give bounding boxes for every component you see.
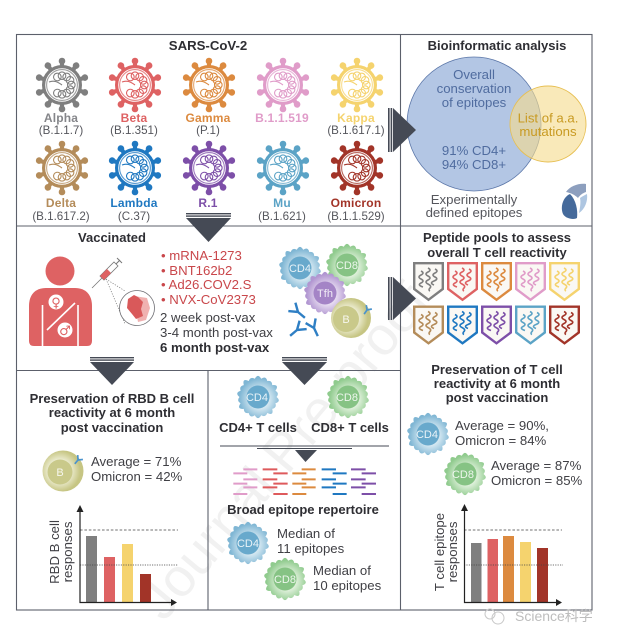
icon: antibodies bbox=[287, 303, 323, 340]
label: CD4+ T cells: CD4+ T cells bbox=[219, 420, 297, 435]
icon: spike protein in magnified circle bbox=[106, 279, 154, 326]
heading: preservation of T cell reactivity: post vaccination bbox=[446, 390, 548, 405]
list: time points: 3-4 month post-vax bbox=[160, 325, 273, 340]
bar chart: T cell epitope responses: responses bbox=[445, 521, 460, 582]
bar chart: RBD B cell responses bbox=[47, 505, 178, 606]
cell: B with stats: Average = 71% bbox=[91, 454, 182, 469]
heading: preservation of RBD B cell reactivity: reactivity at 6 month bbox=[49, 405, 175, 420]
cell: CD8 median: 10 epitopes bbox=[313, 578, 382, 593]
variant: Delta: Delta bbox=[46, 196, 76, 210]
variant: Alpha: (B.1.1.7) bbox=[39, 124, 83, 137]
list: vaccines: • Ad26.COV2.S bbox=[161, 277, 252, 292]
variant: R.1: R.1 bbox=[198, 196, 218, 210]
panel: SARS-CoV-2 variants bbox=[32, 38, 385, 223]
arrow: variants to bioinformatic analysis bbox=[388, 108, 416, 152]
variant: Delta: (B.1.617.2) bbox=[32, 210, 90, 223]
heading: preservation of T cell reactivity: reactivity at 6 month bbox=[434, 376, 560, 391]
variant: Delta bbox=[32, 141, 90, 223]
list: time points: 6 month post-vax bbox=[160, 340, 270, 355]
variant: Alpha bbox=[35, 58, 89, 137]
cell: CD4 median: 11 epitopes bbox=[277, 541, 345, 556]
variant: Lambda: Lambda bbox=[110, 196, 158, 210]
variant: B.1.1.519: B.1.1.519 bbox=[255, 111, 309, 125]
epitope fragments bbox=[233, 469, 376, 494]
venn diagram: List of a.a. bbox=[518, 110, 578, 126]
heading: preservation of T cell reactivity: Preservation of T cell bbox=[431, 362, 563, 377]
variant: Lambda bbox=[108, 141, 162, 223]
cell: CD4 median: Median of bbox=[277, 526, 335, 541]
panel: bioinformatic analysis bbox=[407, 38, 587, 220]
venn diagram: mutations bbox=[519, 124, 577, 139]
cell: CD4: CD4 bbox=[289, 263, 311, 275]
caption: experimentally defined epitopes: defined epitopes bbox=[426, 205, 523, 220]
bar chart: T cell epitope responses: T cell epitope bbox=[432, 513, 447, 591]
variant: Mu: Mu bbox=[273, 196, 291, 210]
watermark: Science科学: Science科学 bbox=[515, 608, 593, 624]
heading line two: overall T cell reactivity bbox=[427, 245, 568, 260]
heading: Bioinformatic analysis: Bioinformatic analysis bbox=[428, 38, 566, 53]
caption: experimentally defined epitopes: Experimentally bbox=[431, 192, 518, 207]
variant: Omicron bbox=[327, 141, 385, 223]
variant: Alpha: Alpha bbox=[44, 111, 78, 125]
variant: Mu bbox=[256, 141, 310, 223]
list: time points bbox=[160, 310, 273, 355]
list: vaccines: • mRNA-1273 bbox=[161, 248, 242, 263]
cell: CD8 with stats: Average = 87% bbox=[491, 458, 582, 473]
list: vaccines: • BNT162b2 bbox=[161, 263, 232, 278]
panel: B cell preservation bbox=[30, 391, 194, 606]
variant: Lambda: (C.37) bbox=[118, 210, 150, 223]
venn diagram: of epitopes bbox=[442, 95, 507, 110]
venn diagram: Overall bbox=[453, 67, 495, 82]
list: vaccines bbox=[161, 248, 256, 307]
variant: Gamma: (P.1) bbox=[196, 124, 220, 137]
cell: CD4: CD4 bbox=[246, 392, 268, 404]
variant: Kappa: Kappa bbox=[337, 111, 375, 125]
variant: Beta: (B.1.351) bbox=[110, 124, 158, 137]
cell: B with stats: Omicron = 42% bbox=[91, 469, 183, 484]
venn diagram: 91% CD4+ bbox=[442, 143, 506, 158]
panel: T cell epitope repertoire bbox=[219, 376, 389, 600]
icon: immune cells bbox=[279, 244, 372, 340]
arrow: variants to vaccinated bbox=[186, 213, 231, 242]
cell: B with stats: B bbox=[56, 467, 64, 479]
arrow: vaccinated to T cell panel bbox=[282, 357, 327, 385]
variant: Gamma: Gamma bbox=[185, 111, 231, 125]
icon: person with sex symbols: ♀ bbox=[51, 296, 61, 311]
cell: Tfh: Tfh bbox=[317, 288, 333, 300]
cell: B with stats bbox=[42, 450, 183, 492]
list: time points: 2 week post-vax bbox=[160, 310, 256, 325]
watermark: Journal Pre-proof: Journal Pre-proof bbox=[127, 272, 442, 631]
cell: CD8 with stats: Omicron = 85% bbox=[491, 473, 583, 488]
bar chart: T cell epitope responses bbox=[432, 504, 563, 606]
heading: Vaccinated: Vaccinated bbox=[78, 230, 146, 245]
bar chart: RBD B cell responses: responses bbox=[60, 521, 75, 582]
cell: CD4 with stats: CD4 bbox=[416, 429, 438, 441]
icon: syringe bbox=[92, 258, 122, 288]
variant: Mu: (B.1.621) bbox=[258, 210, 306, 223]
panel: T cell preservation bbox=[407, 362, 583, 606]
variant: Beta bbox=[108, 58, 162, 137]
icon: journal logo bbox=[562, 184, 587, 219]
variant: Omicron: (B.1.1.529) bbox=[327, 210, 385, 223]
variant: B.1.1.519 bbox=[255, 58, 310, 125]
list: vaccines: • NVX-CoV2373 bbox=[161, 292, 256, 307]
variant: Beta: Beta bbox=[121, 111, 148, 125]
cell: B: B bbox=[342, 314, 350, 326]
cell: CD4 bbox=[237, 376, 279, 418]
venn diagram: 94% CD8+ bbox=[442, 157, 506, 172]
variant: Gamma bbox=[182, 58, 236, 137]
bar chart: RBD B cell responses: RBD B cell bbox=[47, 520, 62, 584]
arrow: vaccinated to peptide pools bbox=[388, 277, 416, 320]
arrow: vaccinated to B cell panel bbox=[90, 357, 134, 385]
cell: CD4 median bbox=[227, 522, 345, 564]
cell: CD8 with stats: CD8 bbox=[452, 469, 474, 481]
cell: CD8: CD8 bbox=[336, 260, 358, 272]
cell: CD8 with stats bbox=[444, 453, 583, 495]
cell: CD8 median: CD8 bbox=[274, 574, 296, 586]
panel: vaccinated bbox=[29, 230, 372, 355]
label: CD8+ T cells: CD8+ T cells bbox=[311, 420, 389, 435]
peptide pool shields bbox=[414, 263, 579, 343]
icon: person with sex symbols: ♂ bbox=[59, 324, 71, 339]
variant: Kappa bbox=[327, 58, 385, 137]
heading: preservation of RBD B cell reactivity: post vaccination bbox=[61, 420, 163, 435]
cell: CD4 with stats: Omicron = 84% bbox=[455, 433, 547, 448]
venn diagram bbox=[407, 57, 586, 191]
cell: CD8 bbox=[327, 376, 369, 418]
variant: Kappa: (B.1.617.1) bbox=[327, 124, 385, 137]
cell: CD4 with stats bbox=[407, 413, 549, 455]
variant: R.1 bbox=[182, 141, 236, 210]
variant: Omicron: Omicron bbox=[331, 196, 381, 210]
arrow: to epitope repertoire bbox=[220, 446, 389, 462]
heading: preservation of RBD B cell reactivity: Preservation of RBD B cell bbox=[30, 391, 194, 406]
icon: person with sex symbols bbox=[29, 256, 92, 346]
heading: peptide pools: Peptide pools to assess bbox=[423, 230, 571, 245]
cell: CD8: CD8 bbox=[336, 392, 358, 404]
cell: CD8 median bbox=[264, 558, 382, 600]
heading: SARS-CoV-2: SARS-CoV-2 bbox=[169, 38, 247, 53]
cell: CD4 median: CD4 bbox=[237, 538, 259, 550]
venn diagram: conservation bbox=[437, 81, 511, 96]
cell: CD4 with stats: Average = 90%, bbox=[455, 418, 549, 433]
heading: broad epitope repertoire: Broad epitope repertoire bbox=[227, 502, 379, 517]
cell: CD8 median: Median of bbox=[313, 563, 371, 578]
panel: peptide pools bbox=[414, 230, 579, 343]
